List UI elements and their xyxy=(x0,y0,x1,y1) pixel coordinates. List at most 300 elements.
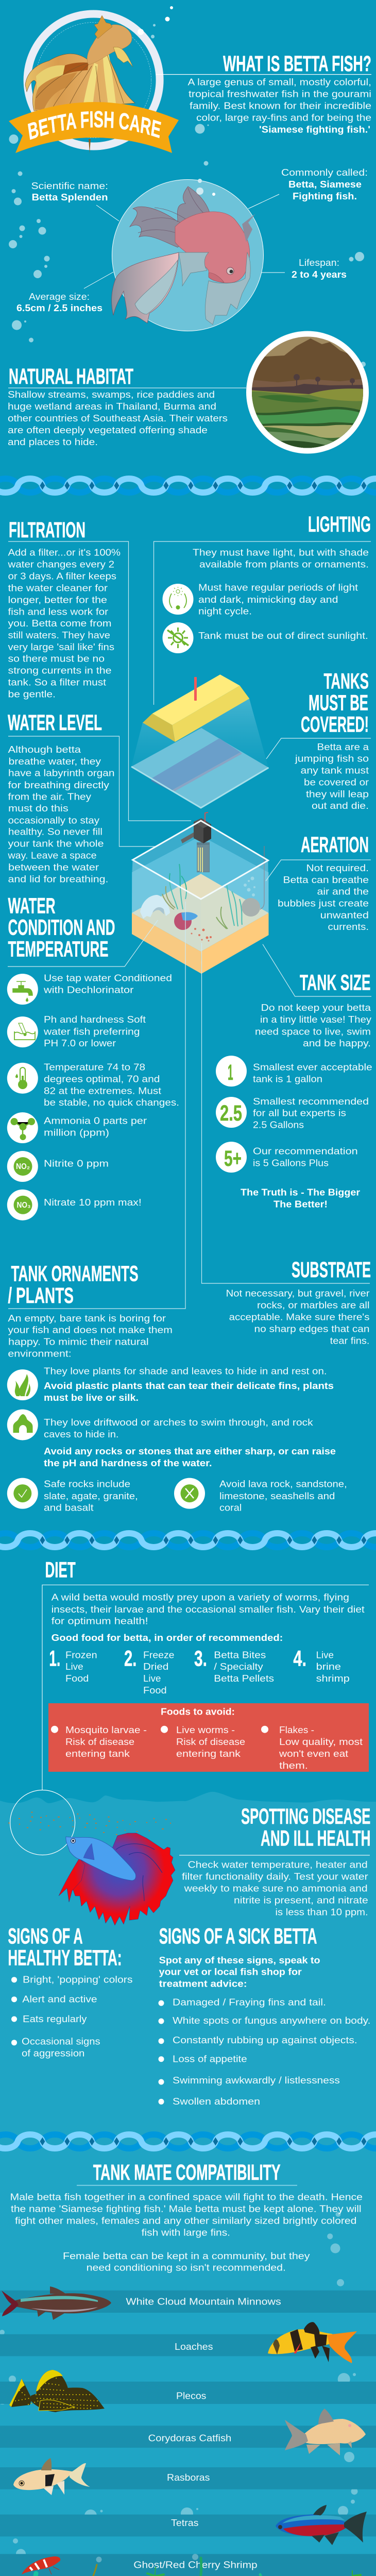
icon: no sunlight xyxy=(163,622,194,653)
text: avoid rocks: the pH and hardness of the water. xyxy=(44,1458,212,1468)
text: substrate xyxy=(226,1289,370,1346)
text: disease xyxy=(182,1860,368,1917)
heading: water condition xyxy=(8,894,115,962)
callout: foods to avoid: Low quality, most xyxy=(279,1737,363,1747)
heading: healthy: SIGNS OF A xyxy=(8,1924,83,1948)
text: aeration: currents. xyxy=(328,922,369,932)
heading: tank ornaments: TANK ORNAMENTS xyxy=(11,1262,139,1286)
text: filtration: Add a filter...or it's 100% xyxy=(8,548,121,558)
band: rasboras xyxy=(0,2467,376,2489)
wave divider xyxy=(0,2134,376,2148)
callout: foods to avoid: Flakes - xyxy=(279,1725,314,1735)
text: filtration: be gentle. xyxy=(8,689,56,699)
panel: filtration xyxy=(7,518,191,821)
text: substrate: tear fins. xyxy=(330,1335,370,1346)
item: temperature: be stable, no quick changes. xyxy=(44,1097,179,1108)
lamp xyxy=(143,674,249,742)
item: ph and hardness xyxy=(7,1014,146,1048)
text: covered: Betta are a xyxy=(317,742,369,752)
panel: lighting xyxy=(153,512,371,705)
icon: gold betta fish xyxy=(25,15,135,154)
bubbles: tank mates xyxy=(0,2212,357,2558)
item: 5 plus gallons: Our recommendation xyxy=(253,1146,358,1157)
item: temperature: degrees optimal, 70 and xyxy=(44,1074,160,1084)
food 1: Food xyxy=(65,1673,89,1684)
divider xyxy=(77,2185,297,2186)
ribbon title: BETTA FISH CARE xyxy=(28,111,161,140)
text: habitat description: are often deeply vegetated offering shade xyxy=(8,425,208,435)
text: light and dark xyxy=(198,583,358,617)
connector: substrate to sand xyxy=(202,943,370,1283)
heading: spotting disease xyxy=(241,1804,370,1851)
text: compatibility: need conditioning so isn't recommended. xyxy=(87,2262,286,2273)
food 2: Dried xyxy=(143,1662,168,1672)
item: 1 gallon: 1 xyxy=(228,1060,233,1085)
heading: healthy: HEALTHY BETTA: xyxy=(8,1945,122,1970)
text: what is betta description: A large genus of small, mostly colorful, xyxy=(187,77,371,88)
text: substrate: rocks, or marbles are all xyxy=(257,1300,370,1311)
text: what is betta description xyxy=(187,77,371,134)
text: light and dark: and dark, mimicking day and xyxy=(198,595,338,605)
air tube xyxy=(260,846,264,909)
item: 5 plus gallons: 5+ xyxy=(224,1146,242,1171)
text: water level: and lid for breathing. xyxy=(8,874,108,884)
item: ph and hardness: PH 7.0 or lower xyxy=(44,1038,116,1048)
band: corydoras catfish xyxy=(0,2426,376,2448)
fish: spotted pleco xyxy=(9,2370,105,2412)
tank back water xyxy=(132,836,269,952)
item: ammonia: Ammonia 0 parts per xyxy=(44,1116,147,1126)
list: healthy signs: of aggression xyxy=(22,2048,84,2058)
item: temperature: 82 at the extremes. Must xyxy=(44,1086,161,1096)
fish: corydoras xyxy=(285,2409,366,2455)
text: habitat description xyxy=(8,389,228,447)
text: filtration xyxy=(7,548,121,699)
callout: lifespan xyxy=(262,258,347,280)
food 1: 1. xyxy=(49,1646,60,1671)
item: 5 plus gallons: is 5 Gallons Plus xyxy=(253,1158,329,1168)
connector: ornaments to tank xyxy=(8,902,185,1309)
food 2: Live xyxy=(143,1673,161,1684)
callout: foods to avoid: Mosquito larvae - xyxy=(65,1725,147,1735)
text: what is betta description: 'Siamese fighting fish.' xyxy=(259,124,370,134)
list: healthy signs: Bright, 'popping' colors xyxy=(23,1974,133,1985)
text: lighting intro: available from plants or ornaments. xyxy=(199,560,369,570)
callout: commonly called: Betta, Siamese xyxy=(288,179,362,190)
item: plants: must be live or silk. xyxy=(44,1393,139,1403)
heading: diet: DIET xyxy=(45,1558,76,1583)
item: plants: They love plants for shade and leaves to hide in and rest on. xyxy=(44,1366,327,1377)
list: sick signs: Damaged / Fraying fins and tail. xyxy=(173,1997,326,2008)
callout: commonly called: Commonly called: xyxy=(281,167,368,178)
food 2 xyxy=(124,1646,174,1696)
text: filtration: you. Betta come from xyxy=(8,618,111,629)
heading: natural habitat: NATURAL HABITAT xyxy=(9,364,133,389)
item: avoid rocks: coral xyxy=(219,1503,242,1513)
sand xyxy=(132,874,269,952)
text: covered xyxy=(295,742,369,811)
callout: scientific name: Scientific name: xyxy=(31,181,108,191)
tank rim xyxy=(133,821,268,899)
text: compatibility xyxy=(10,2192,363,2273)
item: safe rocks: and basalt xyxy=(44,1503,94,1513)
plant: aqua xyxy=(250,2574,271,2576)
text: disease: is less than 10 ppm. xyxy=(275,1907,368,1917)
panel: substrate xyxy=(202,943,371,1346)
text: ornaments intro: An empty, bare tank is boring for xyxy=(8,1313,166,1324)
text: habitat description: and places to hide. xyxy=(8,437,98,447)
band: white cloud mountain minnows xyxy=(0,2291,376,2313)
text: the truth: The Truth is - The Bigger xyxy=(241,1188,360,1198)
subheading: good food: Good food for betta, in order of recommended: xyxy=(52,1633,283,1643)
item: 2.5 gallons: Smallest recommended xyxy=(253,1096,369,1107)
item: arches and caves: They love driftwood or arches to swim through, and rock xyxy=(44,1417,314,1428)
text: compatibility: Male betta fish together in a confined space will fight to the death. Hence xyxy=(10,2192,363,2202)
item: tap water xyxy=(7,973,172,1005)
text: filtration: longer, better for the xyxy=(8,595,107,605)
text: substrate: no sharp edges that can xyxy=(254,1324,370,1334)
item: nitrite xyxy=(7,1151,109,1182)
text: light and dark: Must have regular periods of light xyxy=(198,583,358,593)
text: filtration: so there must be no xyxy=(8,654,105,664)
text: covered: be covered or xyxy=(304,777,369,787)
list: sick signs: Swollen abdomen xyxy=(173,2096,260,2107)
item: 1 gallon xyxy=(216,1056,372,1087)
heading: filtration: FILTRATION xyxy=(9,518,86,543)
text: substrate: acceptable. Make sure there's xyxy=(229,1312,370,1323)
text: covered: they will leap xyxy=(306,789,369,799)
rock and air stone xyxy=(242,898,260,917)
item: nitrate xyxy=(7,1190,142,1221)
text: filtration: strong currents in the xyxy=(8,666,111,676)
text: habitat description: other countries of Southeast Asia. Their waters xyxy=(8,413,228,423)
text: water level: between the water xyxy=(8,862,99,872)
text: ornaments intro xyxy=(8,1313,173,1359)
text: water level: occasionally to stay xyxy=(8,815,99,825)
text: tank size: and be happy. xyxy=(303,1038,371,1048)
text: the truth xyxy=(241,1188,360,1210)
rock cave xyxy=(140,895,170,919)
band: plecos: Plecos xyxy=(176,2391,206,2401)
plant: teal cluster xyxy=(24,2573,54,2576)
item: arches and caves: caves to hide in. xyxy=(44,1429,118,1439)
text: direct sunlight: Tank must be out of direct sunlight. xyxy=(198,631,368,641)
food 1: Frozen xyxy=(65,1650,97,1660)
item: plants xyxy=(7,1366,334,1403)
text: water level: breathe water, they xyxy=(8,756,101,767)
food 3 xyxy=(194,1646,274,1684)
food 3: / Specialty xyxy=(214,1662,263,1672)
list: healthy signs: Eats regularly xyxy=(23,2014,87,2024)
ribbon banner xyxy=(9,102,179,153)
heading: water condition: TEMPERATURE xyxy=(8,937,108,962)
text: ornaments intro: your fish and does not make them xyxy=(8,1325,173,1335)
item: temperature xyxy=(7,1062,179,1108)
callout: foods to avoid: won't even eat xyxy=(279,1749,348,1759)
list: healthy signs: Alert and active xyxy=(22,1994,97,2005)
band: ghost and red cherry shrimp: Ghost/Red Cherry Shrimp xyxy=(133,2560,258,2570)
text: tank size: need space to live, swim xyxy=(255,1026,371,1037)
text: the truth: The Better! xyxy=(274,1199,328,1210)
item: 2.5 gallons: 2.5 xyxy=(220,1101,242,1126)
callout: foods to avoid: entering tank xyxy=(65,1749,130,1759)
band: plecos xyxy=(0,2382,376,2404)
heading: tank ornaments: / PLANTS xyxy=(8,1283,74,1308)
item: avoid rocks xyxy=(174,1478,347,1513)
item: safe rocks: slate, agate, granite, xyxy=(44,1491,138,1501)
callout: average size: 6.5cm / 2.5 inches xyxy=(16,303,102,313)
text: habitat description: Shallow streams, swamps, rice paddies and xyxy=(8,389,215,400)
food 4: shrimp xyxy=(316,1673,350,1684)
fish: white cloud minnow xyxy=(2,2286,111,2320)
item: nitrite: Nitrite 0 ppm xyxy=(44,1158,109,1168)
text: tank size: Do not keep your betta xyxy=(261,1003,371,1013)
callout: scientific name: Betta Splenden xyxy=(32,192,108,202)
item: ph and hardness: Ph and hardness Soft xyxy=(44,1014,146,1025)
list: sick signs: White spots or fungus anywhere on body. xyxy=(173,2015,370,2026)
text: filtration: water changes every 2 xyxy=(7,560,114,570)
text: avoid rocks: Avoid any rocks or stones that are either sharp, or can raise xyxy=(44,1446,336,1456)
item: tap water: with Dechlorinator xyxy=(43,985,133,995)
band: white cloud mountain minnows: White Cloud Mountain Minnows xyxy=(126,2296,281,2307)
glass lid xyxy=(131,728,269,808)
badge: betta fish care logo xyxy=(9,10,179,154)
text: water level: Although betta xyxy=(8,744,81,755)
air bubbles xyxy=(244,877,255,896)
text: vet advice: Spot any of these signs, speak to xyxy=(159,1955,320,1965)
text: disease: Check water temperature, heater and xyxy=(187,1860,368,1870)
heading: tanks must be covered xyxy=(301,669,369,737)
heading: water condition: WATER xyxy=(8,894,56,919)
item: tap water: Use tap water Conditioned xyxy=(44,973,172,983)
item: ph and hardness: water fish preferring xyxy=(43,1026,140,1037)
fish: neon tetra xyxy=(276,2505,367,2545)
text: filtration: fish and less work for xyxy=(8,606,108,617)
food 3: Betta Bites xyxy=(214,1650,266,1660)
background: lower water wave xyxy=(0,1792,376,2576)
plant: olive grass xyxy=(71,2565,110,2576)
text: filtration: the water cleaner for xyxy=(8,583,108,594)
text: disease: weekly to make sure no ammonia and xyxy=(183,1883,368,1893)
text: compatibility: Female betta can be kept in a community, but they xyxy=(63,2251,310,2261)
panel: diet xyxy=(42,1558,369,1790)
wave divider xyxy=(0,1533,376,1547)
item: 2.5 gallons xyxy=(216,1096,369,1130)
text: substrate: Not necessary, but gravel, river xyxy=(226,1289,370,1299)
illustration: food flakes xyxy=(8,1812,171,1835)
band: ghost and red cherry shrimp xyxy=(0,2554,376,2576)
food 2: 2. xyxy=(124,1646,136,1671)
text: disease: nitrite is present, and nitrate xyxy=(234,1895,368,1905)
panel: tank ornaments and plants xyxy=(7,902,347,1513)
text: water level: for breathing directly xyxy=(8,780,109,790)
item: avoid rocks: limestone, seashells and xyxy=(219,1491,335,1501)
plant: bright green xyxy=(176,2558,202,2576)
food 1: Live xyxy=(65,1662,83,1672)
text: covered: jumping fish so xyxy=(295,753,369,764)
plant: leaf stems xyxy=(352,2571,366,2576)
panel: water level xyxy=(7,710,174,884)
connector: lighting to lamp xyxy=(153,541,371,705)
text: vet advice xyxy=(159,1955,320,1989)
item: ammonia: million (ppm) xyxy=(44,1127,109,1138)
item: nitrite: NO₂ xyxy=(16,1162,30,1171)
wave divider xyxy=(0,479,376,493)
light beam xyxy=(131,699,268,808)
divider xyxy=(179,1855,370,1856)
panel: signs of sick betta xyxy=(159,1924,370,2107)
callout: foods to avoid xyxy=(48,1703,369,1772)
filter xyxy=(181,812,211,872)
text: water level: from the air. They xyxy=(8,791,91,802)
item: nitrate: NO₃ xyxy=(16,1201,31,1210)
text: water level: must do this xyxy=(8,803,69,814)
text: ornaments intro: environment: xyxy=(8,1348,72,1359)
text: diet intro: insects, their larvae and the occasional smaller fish. Vary their diet xyxy=(52,1604,365,1615)
connector: water level to tank xyxy=(8,736,174,846)
list: sick signs: Swimming awkwardly / listlessness xyxy=(173,2075,340,2086)
food 4 xyxy=(293,1646,350,1684)
panel: aeration xyxy=(266,833,371,932)
text: aeration: Betta can breathe xyxy=(283,875,369,885)
panel: tank size xyxy=(216,944,372,1210)
text: compatibility: fight other males, females and any other similarly sized brightly colored xyxy=(15,2216,356,2226)
badge ring xyxy=(27,14,160,146)
icon: day night cycle xyxy=(163,584,194,615)
bubbles: header xyxy=(9,6,366,367)
frame line: diet xyxy=(42,1585,369,1790)
list: sick signs: Loss of appetite xyxy=(173,2054,247,2064)
item: plants: Avoid plastic plants that can tear their delicate fins, plants xyxy=(44,1381,334,1391)
item: arches and caves xyxy=(7,1410,314,1440)
fish: cherry shrimp xyxy=(22,2556,60,2574)
band: rasboras: Rasboras xyxy=(167,2472,210,2483)
heading: water condition: CONDITION AND xyxy=(8,916,115,940)
connector: water condition to tank xyxy=(8,920,158,967)
text: diet intro xyxy=(52,1592,365,1626)
fish: rasbora xyxy=(13,2458,90,2495)
small betta fish xyxy=(174,912,198,930)
text: aeration xyxy=(278,863,369,932)
callout: scientific name xyxy=(31,181,119,221)
item: avoid rocks: Avoid lava rock, sandstone, xyxy=(219,1479,347,1489)
callout: average size xyxy=(16,272,113,313)
text: aeration: bubbles just create xyxy=(278,898,369,908)
callout: lifespan: Lifespan: xyxy=(299,258,339,268)
food 4: brine xyxy=(316,1662,341,1672)
food 4: Live xyxy=(316,1650,334,1660)
text: vet advice: your vet or local fish shop for xyxy=(159,1967,302,1977)
text: diet intro: for optimum health! xyxy=(52,1616,148,1626)
text: filtration: very large 'sail like' fins xyxy=(8,642,114,652)
text: covered: out and die. xyxy=(312,801,369,811)
text: light and dark: night cycle. xyxy=(198,606,252,617)
illustration: feeding ring xyxy=(10,1790,75,1855)
illustration: isometric aquarium xyxy=(131,674,269,974)
item: temperature: Temperature 74 to 78 xyxy=(44,1062,145,1072)
fish food xyxy=(191,928,212,942)
panel: signs of healthy betta xyxy=(8,1924,133,2058)
text: water level: your tank the whole xyxy=(8,839,104,849)
connector: cover xyxy=(266,738,371,759)
text: compatibility: the name 'Siamese fighting fish.' Male betta must be kept alone. They will xyxy=(11,2204,362,2214)
heading: healthy xyxy=(8,1924,122,1970)
band: loaches xyxy=(0,2334,376,2356)
item: nitrate: Nitrate 10 ppm max! xyxy=(44,1197,142,1208)
panel: spotting disease xyxy=(179,1804,370,1917)
item: 1 gallon: Smallest ever acceptable xyxy=(253,1062,372,1072)
text: water level: healthy. So never fill xyxy=(8,827,102,837)
panel: water condition and temperature xyxy=(7,894,179,1221)
heading: water level: WATER LEVEL xyxy=(8,710,102,735)
text: water level: have a labyrinth organ xyxy=(8,768,115,778)
text: what is betta description: color, large ray-fins and for being the xyxy=(196,113,371,123)
text: what is betta description: family. Best known for their incredible xyxy=(190,101,371,111)
band: corydoras catfish: Corydoras Catfish xyxy=(148,2433,231,2443)
callout: foods to avoid: Foods to avoid: xyxy=(161,1706,235,1717)
text: covered: any tank must xyxy=(301,766,369,776)
callout: foods to avoid: Risk of disease xyxy=(65,1737,134,1747)
seabed plants xyxy=(24,2558,373,2576)
text: filtration: or 3 days. A filter keeps xyxy=(8,571,116,582)
divider xyxy=(156,74,371,75)
item: safe rocks xyxy=(7,1478,138,1513)
item: 1 gallon: tank is 1 gallon xyxy=(253,1074,322,1084)
divider xyxy=(8,387,246,388)
text: lighting intro xyxy=(193,548,369,570)
text: disease: filter functionality daily. Test your water xyxy=(182,1871,368,1882)
list: healthy signs xyxy=(11,1974,133,2058)
food 3: 3. xyxy=(194,1646,207,1671)
callout: foods to avoid: Risk of disease xyxy=(176,1737,245,1747)
list: sick signs xyxy=(159,1997,370,2107)
band: tetras: Tetras xyxy=(171,2518,199,2528)
text: compatibility: fish with large fins. xyxy=(142,2227,230,2238)
text: tank size xyxy=(255,1003,371,1048)
illustration: red and blue betta xyxy=(59,1833,175,1925)
text: water level: way. Leave a space xyxy=(7,851,97,861)
text: aeration: Not required. xyxy=(306,863,369,873)
panel: tanks must be covered xyxy=(266,669,371,811)
callout: foods to avoid: them. xyxy=(279,1760,308,1771)
food 1 xyxy=(49,1646,97,1684)
text: filtration: tank. So a filter must xyxy=(8,677,106,687)
callout: average size: Average size: xyxy=(29,292,90,302)
item: ammonia xyxy=(7,1112,147,1143)
text: aeration: air and the xyxy=(317,887,369,897)
text: avoid rocks xyxy=(44,1446,336,1468)
text: filtration: still waters. They have xyxy=(8,630,110,640)
callout: lifespan: 2 to 4 years xyxy=(292,269,347,280)
text: lighting intro: They must have light, but with shade xyxy=(193,548,369,558)
plant: green stem xyxy=(155,2567,156,2576)
item: safe rocks: Safe rocks include xyxy=(44,1479,130,1489)
item: 2.5 gallons: for all but experts is xyxy=(253,1108,346,1118)
background: upper water xyxy=(0,0,376,1803)
connector: aeration xyxy=(266,860,371,881)
heading: tank ornaments xyxy=(8,1262,139,1308)
text: aeration: unwanted xyxy=(320,910,369,920)
plants xyxy=(162,864,242,929)
callout: foods to avoid: Live worms - xyxy=(176,1725,235,1735)
food 3: Betta Pellets xyxy=(214,1673,274,1684)
illustration: pink betta in circle xyxy=(112,179,264,331)
callout: commonly called xyxy=(248,167,368,209)
list: healthy signs: Occasional signs xyxy=(22,2037,100,2047)
text: ornaments intro: happy. To mimic their natural xyxy=(8,1337,149,1347)
item: 5 plus gallons xyxy=(216,1142,358,1173)
front glass xyxy=(132,860,201,952)
